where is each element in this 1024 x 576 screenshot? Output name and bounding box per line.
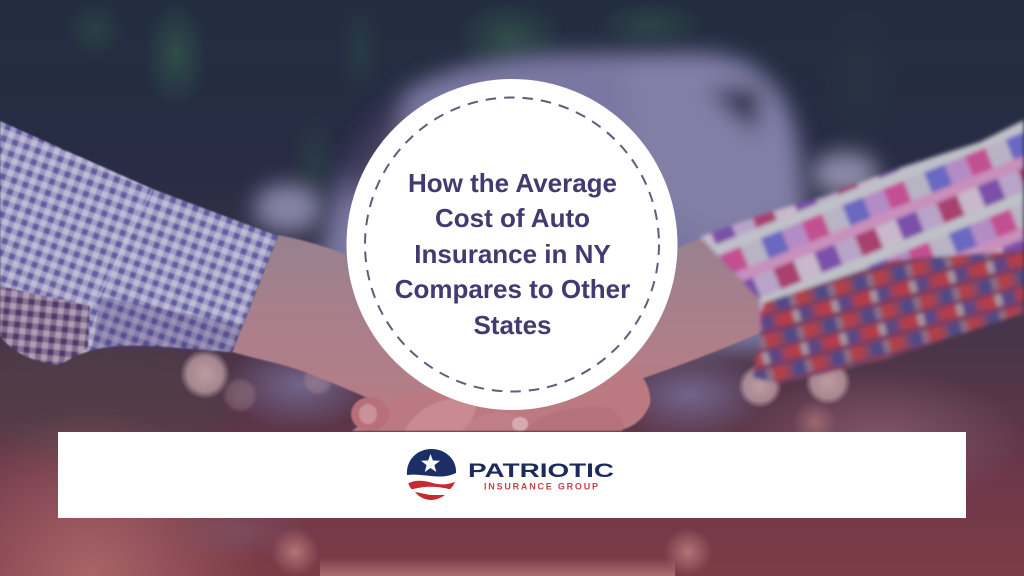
- right forearm: [560, 238, 762, 395]
- title: Insurance in NY: [414, 239, 611, 269]
- white logo band: [58, 432, 966, 518]
- title: States: [473, 310, 552, 340]
- wordmark: PATRIOTIC: [468, 460, 614, 482]
- right shirt sleeve: plaid: [700, 120, 1024, 383]
- tagline: INSURANCE GROUP: [484, 482, 598, 492]
- blurred white car: [300, 52, 806, 350]
- icon: star and stripes badge: [407, 449, 456, 500]
- blurred lower road tones: [0, 340, 1024, 576]
- title: Compares to Other: [395, 274, 630, 304]
- blurred lights low on the road: [271, 528, 319, 576]
- left shirt sleeve: gingham: [0, 121, 278, 365]
- title: Cost of Auto: [435, 203, 590, 233]
- title: [395, 168, 630, 340]
- logo: Patriotic Insurance Group: [407, 449, 614, 500]
- dashed ring: [365, 98, 659, 392]
- left forearm: [232, 235, 470, 418]
- clasped hands: [351, 366, 650, 431]
- white title circle: [346, 79, 678, 410]
- blurred foliage: [65, 0, 900, 220]
- blurred headlights: [180, 349, 230, 399]
- title: How the Average: [408, 168, 617, 198]
